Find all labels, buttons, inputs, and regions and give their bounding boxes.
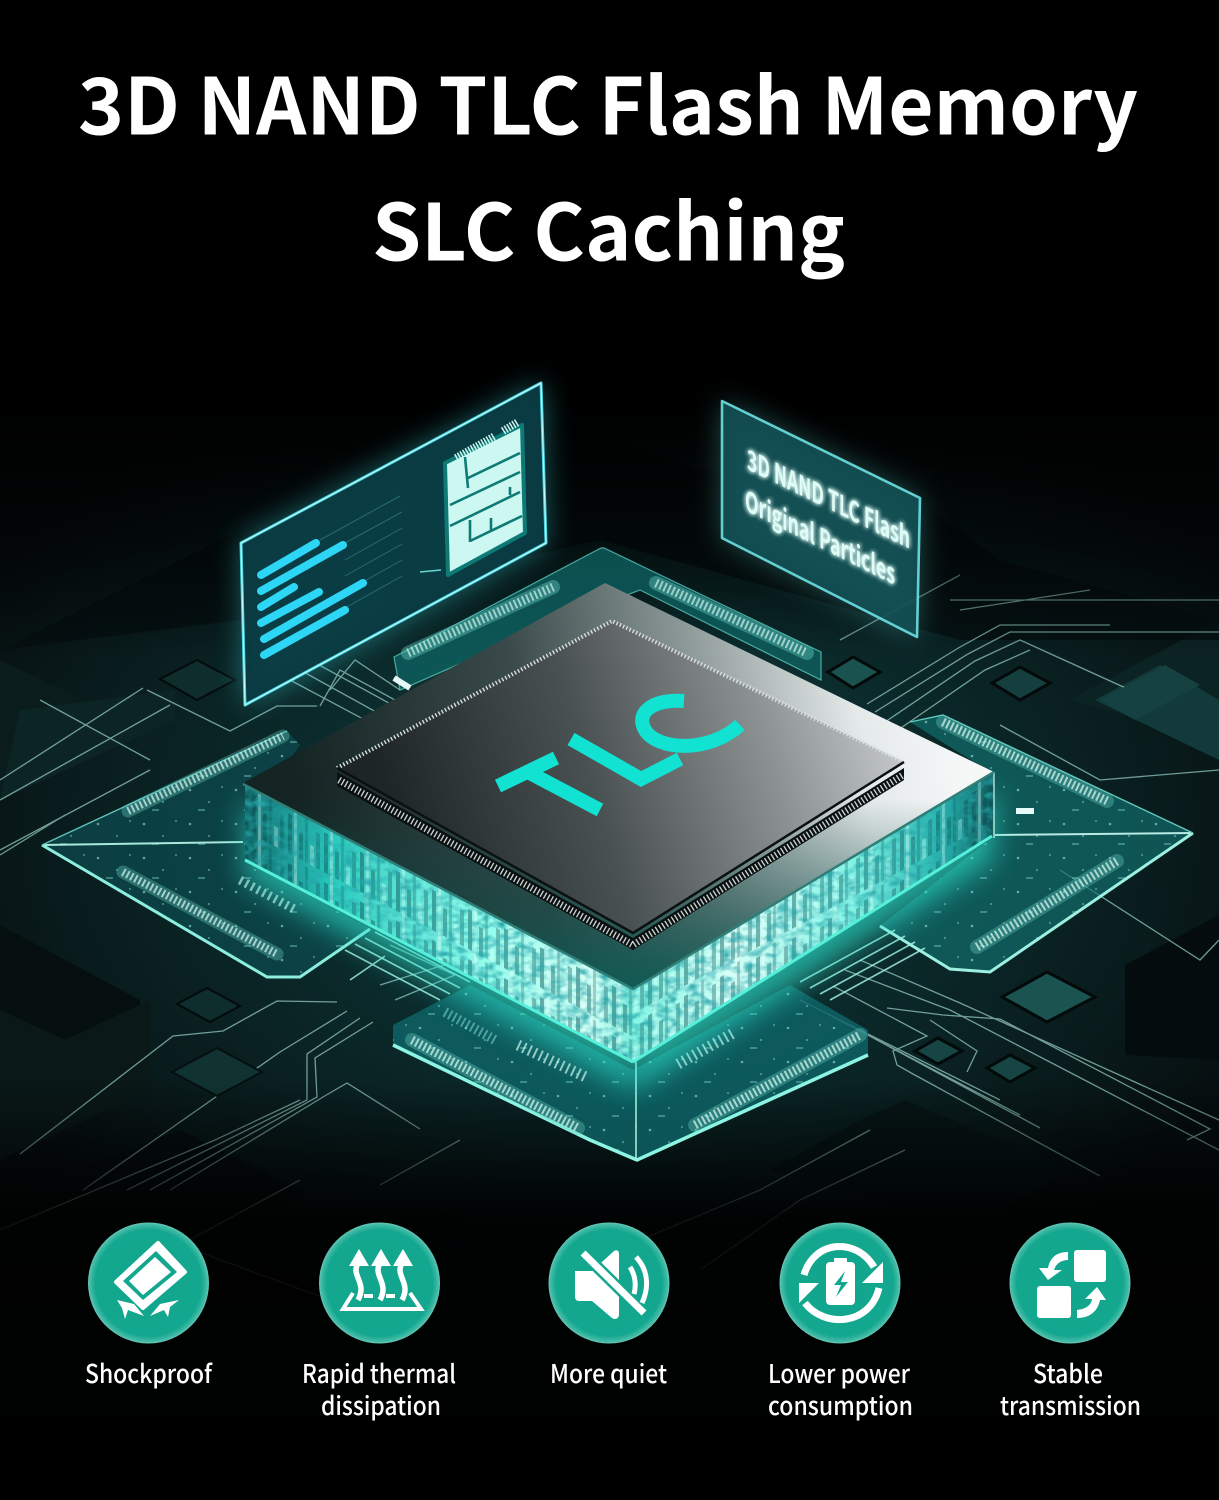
feature: Stable transmission: [1000, 1222, 1141, 1423]
die with pins: [337, 621, 904, 950]
glass panel: bottom: [393, 985, 868, 1160]
chip glow: [245, 790, 994, 1090]
icon: heat arrows over plate: [343, 1249, 421, 1309]
glass circuit panels around the chip: [42, 548, 1193, 1160]
TLC logo: [498, 701, 740, 810]
TLC chip: [243, 583, 995, 1090]
feature: Lower power consumption: [768, 1222, 913, 1423]
label: More quiet: [550, 1354, 667, 1391]
faint outline rows: [320, 496, 402, 608]
glass panel: top: [394, 548, 821, 690]
feature: Rapid thermal dissipation: [302, 1222, 456, 1423]
label: Lower power: [768, 1354, 911, 1391]
label: Shockproof: [85, 1354, 213, 1391]
small board chips: [160, 657, 1200, 1096]
icon: swapping squares: [1037, 1250, 1106, 1318]
label: Stable: [1033, 1354, 1103, 1391]
glowing cell stack: right face: [633, 772, 995, 1064]
connector traces under chip: [345, 930, 925, 1000]
label: [302, 1354, 456, 1423]
icon: shock-absorbing card: [116, 1243, 185, 1319]
panel text: Original Particles: [745, 478, 895, 593]
icon: M.2 SSD board: [420, 422, 525, 575]
label: [768, 1354, 913, 1423]
glass panel: right: [880, 715, 1193, 972]
title: 3D NAND TLC Flash Memory: [78, 46, 1138, 158]
feature: Shockproof: [85, 1222, 213, 1391]
label: Rapid thermal: [302, 1354, 456, 1391]
chip top plate: [243, 583, 994, 989]
floating panel: SSD schematic: [241, 382, 546, 705]
glass panel: left: [42, 731, 370, 977]
label: transmission: [1000, 1386, 1141, 1423]
circuit traces: [0, 575, 1219, 1300]
title: [78, 46, 1138, 284]
floating panel: 3D NAND label: [722, 401, 920, 637]
glowing cell stack: left face: [245, 785, 635, 1065]
panel text: [745, 437, 910, 593]
dark board blocks: [0, 400, 1219, 1260]
icon: muted speaker: [575, 1250, 647, 1319]
icon: battery in cycle arrows: [799, 1246, 883, 1320]
label: [1000, 1354, 1141, 1423]
feature: More quiet: [548, 1222, 670, 1391]
cyan text bars: [261, 543, 363, 655]
panel text: 3D NAND TLC Flash: [747, 437, 910, 557]
title: SLC Caching: [372, 172, 845, 284]
label: consumption: [768, 1386, 913, 1423]
label: dissipation: [321, 1386, 441, 1423]
